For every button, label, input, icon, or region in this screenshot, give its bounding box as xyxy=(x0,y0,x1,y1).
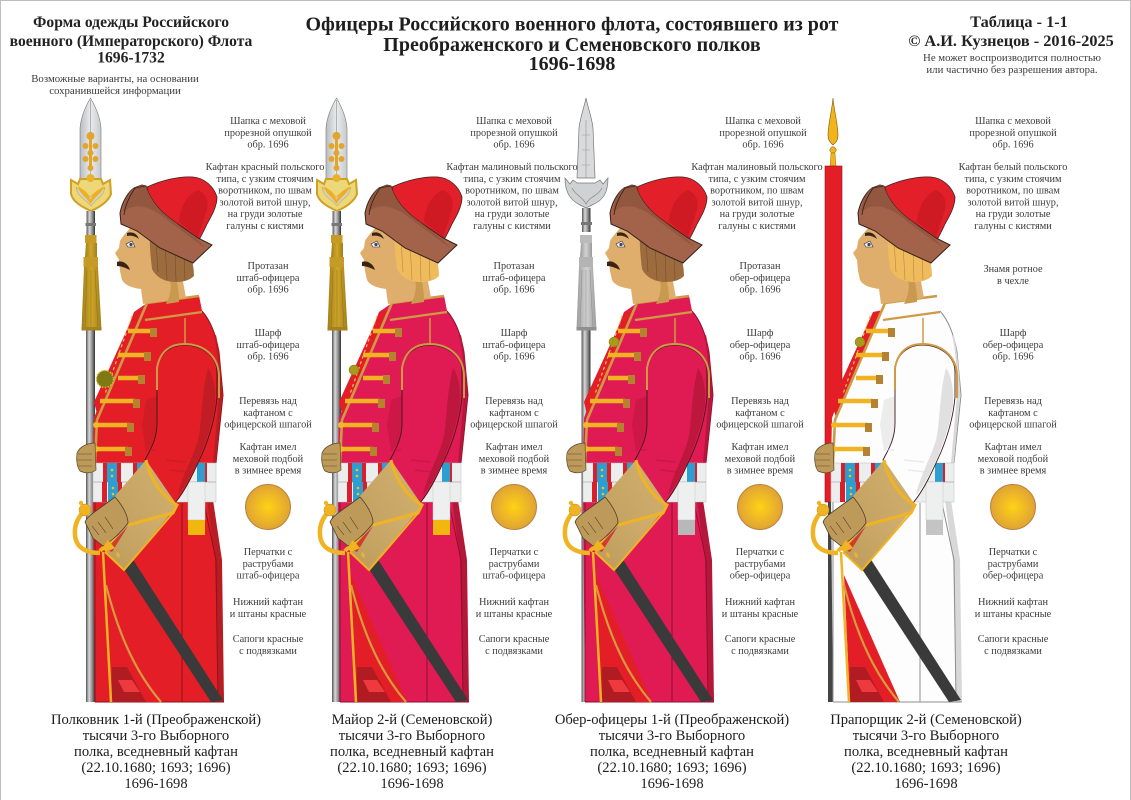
caption figure 3: тысячи 3-го Выборного xyxy=(599,728,745,744)
note: caftan: Кафтан малиновый польского xyxy=(691,162,823,173)
note: caftan: галуны с кистями xyxy=(473,221,551,232)
note: under-caftan: Нижний кафтан xyxy=(233,597,303,608)
note: partisan: обер-офицера xyxy=(730,273,791,284)
caption figure 1: (22.10.1680; 1693; 1696) xyxy=(81,760,231,776)
note: boots: с подвязками xyxy=(239,646,297,657)
note: under-caftan: и штаны красные xyxy=(722,609,799,620)
note: hat: обр. 1696 xyxy=(992,140,1034,151)
face and hair xyxy=(115,228,194,304)
note: partisan: штаб-офицера xyxy=(237,273,300,284)
left header note: Возможные варианты, на основании xyxy=(31,73,199,85)
inner lining, cords and boot xyxy=(103,552,162,702)
fur hat xyxy=(120,177,217,263)
note: sword belt: Перевязь над xyxy=(731,396,789,407)
caption figure 3: 1696-1698 xyxy=(640,776,704,792)
sword with scabbard xyxy=(565,510,713,702)
note: scarf: обер-офицера xyxy=(983,340,1044,351)
caption figure 2: тысячи 3-го Выборного xyxy=(339,728,485,744)
note: gloves: обер-офицера xyxy=(983,571,1044,582)
coat skirt xyxy=(583,500,714,702)
note: hat: прорезной опушкой xyxy=(969,128,1057,139)
caption figure 4: 1696-1698 xyxy=(894,776,958,792)
note: boots: с подвязками xyxy=(731,646,789,657)
note: sword belt: офицерской шпагой xyxy=(224,420,312,431)
glove with cuff xyxy=(79,460,177,570)
note: sword belt: офицерской шпагой xyxy=(969,420,1057,431)
button swatch xyxy=(990,484,1036,530)
note: gloves: штаб-офицера xyxy=(237,571,300,582)
note: gloves: раструбами xyxy=(489,559,540,570)
figure 4: ensign in white caftan xyxy=(813,98,962,702)
caption figure 4: (22.10.1680; 1693; 1696) xyxy=(851,760,1001,776)
note: scarf: обр. 1696 xyxy=(493,352,535,363)
notes column 1 xyxy=(206,116,324,657)
note: scarf: Шарф xyxy=(1000,328,1027,339)
caption figure 1: 1696-1698 xyxy=(124,776,188,792)
fur hat xyxy=(610,177,707,263)
note: caftan: галуны с кистями xyxy=(974,221,1052,232)
chest lace xyxy=(583,328,647,456)
note: fur lining: Кафтан имел xyxy=(486,442,542,453)
note: under-caftan: Нижний кафтан xyxy=(479,597,549,608)
coat skirt xyxy=(93,500,224,702)
note: caftan: типа, с узким стоячим xyxy=(216,174,314,185)
chest lace xyxy=(831,328,895,456)
main title: Офицеры Российского военного флота, состоявшего из рот xyxy=(306,14,839,36)
scarf medallion xyxy=(96,370,114,388)
note: caftan: типа, с узким стоячим xyxy=(708,174,806,185)
coat upper body xyxy=(831,296,961,463)
note: gloves: раструбами xyxy=(735,559,786,570)
note: sword belt: кафтаном с xyxy=(735,408,785,419)
note: boots: с подвязками xyxy=(984,646,1042,657)
scarf medallion xyxy=(349,365,359,375)
note: under-caftan: и штаны красные xyxy=(975,609,1052,620)
scarf medallion xyxy=(609,337,619,347)
caption figure 3: полка, вседневный кафтан xyxy=(590,744,754,760)
note: boots: Сапоги красные xyxy=(233,634,304,645)
scarf medallion xyxy=(855,337,865,347)
note: partisan: Протазан xyxy=(248,261,289,272)
button swatch xyxy=(492,484,536,530)
note: hat: обр. 1696 xyxy=(247,140,289,151)
figure 2: major in crimson caftan xyxy=(317,98,469,702)
note: caftan: Кафтан белый польского xyxy=(959,162,1067,173)
note: scarf: Шарф xyxy=(747,328,774,339)
note: caftan: золотой витой шнур, xyxy=(967,197,1059,208)
note: gloves: Перчатки с xyxy=(736,547,785,558)
note: caftan: золотой витой шнур, xyxy=(466,197,558,208)
partisan: staff officer gold xyxy=(71,98,111,702)
note: hat: Шапка с меховой xyxy=(476,116,552,127)
inner lining, cords and boot xyxy=(348,552,407,702)
coat upper body xyxy=(583,296,713,463)
note: gloves: Перчатки с xyxy=(490,547,539,558)
caption figure 4: полка, вседневный кафтан xyxy=(844,744,1008,760)
inner lining, cords and boot xyxy=(593,552,652,702)
note: gloves: штаб-офицера xyxy=(483,571,546,582)
note: caftan: галуны с кистями xyxy=(226,221,304,232)
note: fur lining: Кафтан имел xyxy=(240,442,296,453)
caption figure 4: тысячи 3-го Выборного xyxy=(853,728,999,744)
coat upper body xyxy=(338,296,468,463)
left hand on staff xyxy=(322,443,341,473)
note: boots: с подвязками xyxy=(485,646,543,657)
note: sword belt: Перевязь над xyxy=(485,396,543,407)
note: partisan: Протазан xyxy=(740,261,781,272)
partisan: silver xyxy=(565,98,608,702)
sword with scabbard xyxy=(320,510,468,702)
note: under-caftan: и штаны красные xyxy=(476,609,553,620)
note: fur lining: меховой подбой xyxy=(233,454,304,465)
sash belt xyxy=(93,463,216,535)
notes column 4 xyxy=(959,116,1067,657)
note: caftan: типа, с узким стоячим xyxy=(964,174,1062,185)
sash belt xyxy=(338,463,461,535)
face and hair xyxy=(605,228,684,304)
note: caftan: золотой витой шнур, xyxy=(711,197,803,208)
note: caftan: Кафтан красный польского xyxy=(206,162,324,173)
note: fur lining: в зимнее время xyxy=(235,466,302,477)
sleeve xyxy=(390,344,464,503)
note: sword belt: кафтаном с xyxy=(988,408,1038,419)
sash belt xyxy=(583,463,706,535)
notes column 3 xyxy=(691,116,823,657)
cased colour: pole, finial and red cover xyxy=(825,98,842,702)
note: hat: прорезной опушкой xyxy=(719,128,807,139)
face and hair xyxy=(360,228,439,304)
note: scarf: обр. 1696 xyxy=(739,352,781,363)
coat skirt xyxy=(831,500,962,702)
note: scarf: штаб-офицера xyxy=(237,340,300,351)
note: scarf: обр. 1696 xyxy=(247,352,289,363)
left header: uniform title: 1696-1732 xyxy=(97,50,165,66)
note: partisan: обр. 1696 xyxy=(493,285,535,296)
note: sword belt: кафтаном с xyxy=(243,408,293,419)
note: fur lining: меховой подбой xyxy=(978,454,1049,465)
left hand on staff xyxy=(77,443,96,473)
note: under-caftan: Нижний кафтан xyxy=(725,597,795,608)
left header: uniform title: военного (Императорского) Флота xyxy=(10,33,253,50)
sword with scabbard xyxy=(75,510,223,702)
button swatch xyxy=(246,484,290,530)
note: boots: Сапоги красные xyxy=(725,634,796,645)
note: partisan: штаб-офицера xyxy=(483,273,546,284)
note: fur lining: в зимнее время xyxy=(481,466,548,477)
right header note: или частично без разрешения автора. xyxy=(926,64,1098,76)
moustache xyxy=(362,261,375,270)
glove with cuff xyxy=(569,460,667,570)
chest lace xyxy=(338,328,402,456)
note: fur lining: в зимнее время xyxy=(980,466,1047,477)
left header: uniform title: Форма одежды Российского xyxy=(33,14,229,31)
caption figure 3: Обер-офицеры 1-й (Преображенской) xyxy=(555,712,789,728)
note: sword belt: офицерской шпагой xyxy=(716,420,804,431)
note: gloves: обер-офицера xyxy=(730,571,791,582)
note: caftan: на груди золотые xyxy=(475,209,550,220)
note: caftan: на груди золотые xyxy=(228,209,303,220)
note: hat: прорезной опушкой xyxy=(470,128,558,139)
moustache xyxy=(117,261,130,270)
note: gloves: раструбами xyxy=(243,559,294,570)
moustache xyxy=(607,261,620,270)
note: under-caftan: и штаны красные xyxy=(230,609,307,620)
note: caftan: воротником, по швам xyxy=(966,186,1060,197)
left hand on staff xyxy=(815,443,834,473)
fur hat xyxy=(365,177,462,263)
caption figure 2: (22.10.1680; 1693; 1696) xyxy=(337,760,487,776)
caption figure 4: Прапорщик 2-й (Семеновской) xyxy=(830,712,1022,728)
sleeve xyxy=(635,344,709,503)
note: partisan: Протазан xyxy=(494,261,535,272)
note: fur lining: меховой подбой xyxy=(725,454,796,465)
figure 3: senior officer in crimson caftan xyxy=(565,98,714,702)
note: scarf: обер-офицера xyxy=(730,340,791,351)
note: partisan: обр. 1696 xyxy=(247,285,289,296)
sword with scabbard xyxy=(813,510,961,702)
sash belt xyxy=(831,463,954,535)
figure 1: colonel in red caftan xyxy=(71,98,224,702)
note: scarf: обр. 1696 xyxy=(992,352,1034,363)
note: caftan: воротником, по швам xyxy=(465,186,559,197)
glove with cuff xyxy=(817,460,915,570)
note: partisan: обр. 1696 xyxy=(739,285,781,296)
note: fur lining: Кафтан имел xyxy=(984,442,1042,453)
note: hat: обр. 1696 xyxy=(493,140,535,151)
note: under-caftan: Нижний кафтан xyxy=(978,597,1048,608)
coat skirt xyxy=(338,500,469,702)
inner lining, cords and boot xyxy=(841,552,900,702)
note: boots: Сапоги красные xyxy=(978,634,1049,645)
main title: 1696-1698 xyxy=(529,53,615,75)
button swatch xyxy=(738,484,782,530)
note: boots: Сапоги красные xyxy=(479,634,550,645)
note: hat: Шапка с меховой xyxy=(725,116,801,127)
note: sword belt: офицерской шпагой xyxy=(470,420,558,431)
note: caftan: галуны с кистями xyxy=(718,221,796,232)
note: sword belt: Перевязь над xyxy=(239,396,297,407)
note: colour: в чехле xyxy=(997,276,1029,287)
caption figure 1: Полковник 1-й (Преображенской) xyxy=(51,712,261,728)
glove with cuff xyxy=(324,460,422,570)
notes column 2 xyxy=(446,116,578,657)
right header: table number and copyright: Таблица - 1-1 xyxy=(970,12,1068,31)
note: caftan: на груди золотые xyxy=(720,209,795,220)
note: scarf: Шарф xyxy=(501,328,528,339)
note: scarf: Шарф xyxy=(255,328,282,339)
note: scarf: штаб-офицера xyxy=(483,340,546,351)
main title: Преображенского и Семеновского полков xyxy=(383,34,761,56)
caption figure 1: тысячи 3-го Выборного xyxy=(83,728,229,744)
note: colour: Знамя ротное xyxy=(983,264,1043,275)
note: caftan: на груди золотые xyxy=(976,209,1051,220)
note: caftan: типа, с узким стоячим xyxy=(463,174,561,185)
caption figure 2: 1696-1698 xyxy=(380,776,444,792)
note: hat: обр. 1696 xyxy=(742,140,784,151)
fur hat xyxy=(858,177,955,263)
note: hat: Шапка с меховой xyxy=(230,116,306,127)
chest lace xyxy=(93,328,157,456)
note: caftan: Кафтан малиновый польского xyxy=(446,162,578,173)
caption figure 3: (22.10.1680; 1693; 1696) xyxy=(597,760,747,776)
caption figure 2: Майор 2-й (Семеновской) xyxy=(332,712,493,728)
right header: table number and copyright: © А.И. Кузнецов - 2016-2025 xyxy=(908,31,1114,50)
note: gloves: раструбами xyxy=(988,559,1039,570)
face and hair xyxy=(853,228,932,304)
sleeve xyxy=(145,344,219,503)
note: fur lining: Кафтан имел xyxy=(732,442,788,453)
note: gloves: Перчатки с xyxy=(989,547,1038,558)
note: hat: прорезной опушкой xyxy=(224,128,312,139)
caption figure 2: полка, вседневный кафтан xyxy=(330,744,494,760)
partisan: staff officer gold xyxy=(317,98,357,702)
sleeve xyxy=(883,344,957,503)
left header note: сохранившейся информации xyxy=(49,85,181,97)
note: hat: Шапка с меховой xyxy=(975,116,1051,127)
coat upper body xyxy=(93,296,223,463)
note: caftan: воротником, по швам xyxy=(710,186,804,197)
note: sword belt: кафтаном с xyxy=(489,408,539,419)
caption figure 1: полка, вседневный кафтан xyxy=(74,744,238,760)
note: fur lining: меховой подбой xyxy=(479,454,550,465)
note: caftan: воротником, по швам xyxy=(218,186,312,197)
note: caftan: золотой витой шнур, xyxy=(219,197,311,208)
note: fur lining: в зимнее время xyxy=(727,466,794,477)
note: gloves: Перчатки с xyxy=(244,547,293,558)
right header note: Не может воспроизводится полностью xyxy=(923,52,1101,64)
left hand on staff xyxy=(567,443,586,473)
note: sword belt: Перевязь над xyxy=(984,396,1042,407)
